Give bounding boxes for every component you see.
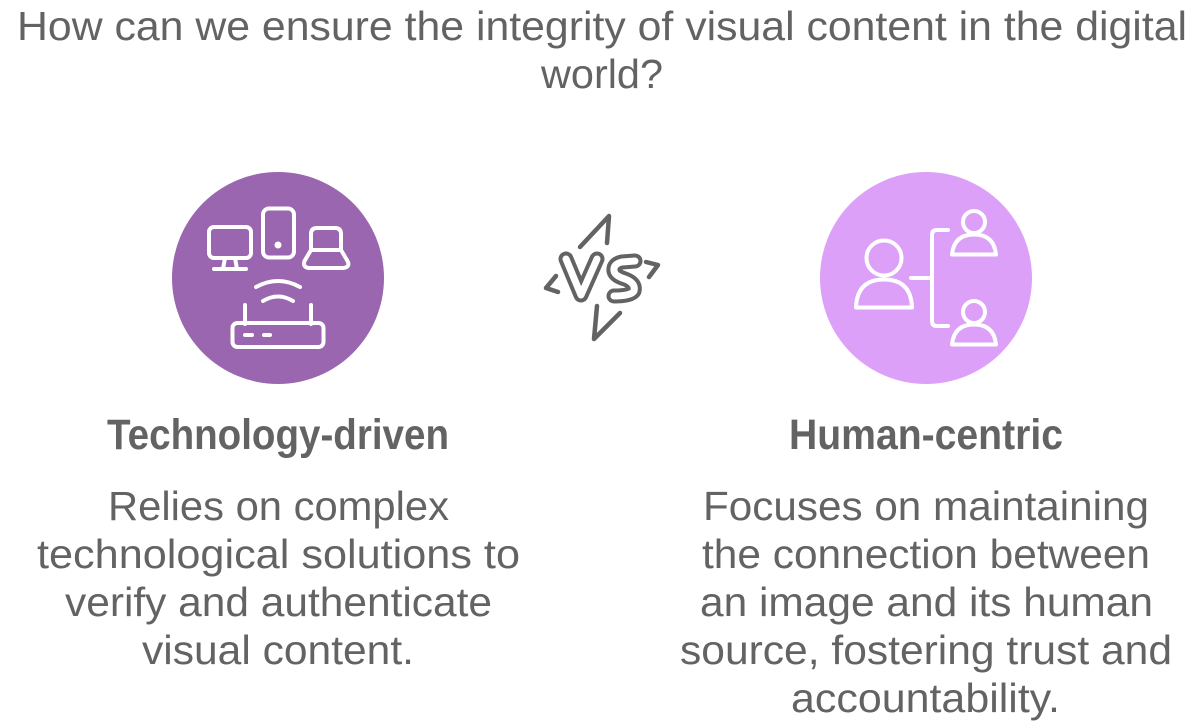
text block: technology description: technological solutions to xyxy=(37,531,520,577)
panel: human-centric xyxy=(680,172,1172,721)
text block: technology description: Relies on complex xyxy=(108,483,449,529)
text block: human description: the connection between xyxy=(702,531,1150,577)
title xyxy=(17,3,1187,97)
text block: human description: Focuses on maintaining xyxy=(703,483,1149,529)
icon: people hierarchy xyxy=(820,172,1032,384)
title: world? xyxy=(540,51,663,97)
text block: technology description: visual content. xyxy=(142,627,414,673)
panel: technology-driven xyxy=(37,172,520,673)
text block: human description: accountability. xyxy=(791,675,1060,721)
icon: devices and router xyxy=(172,172,384,384)
text block: human description: source, fostering trust and xyxy=(680,627,1172,673)
title: How can we ensure the integrity of visual content in the digital xyxy=(17,3,1187,49)
heading: technology-driven: Technology-driven xyxy=(107,411,449,459)
text block: human description xyxy=(680,483,1172,721)
text block: human description: an image and its human xyxy=(700,579,1153,625)
heading: human-centric: Human-centric xyxy=(789,411,1063,459)
text block: technology description: verify and authenticate xyxy=(65,579,492,625)
icon: versus xyxy=(546,216,658,339)
text block: technology description xyxy=(37,483,520,673)
